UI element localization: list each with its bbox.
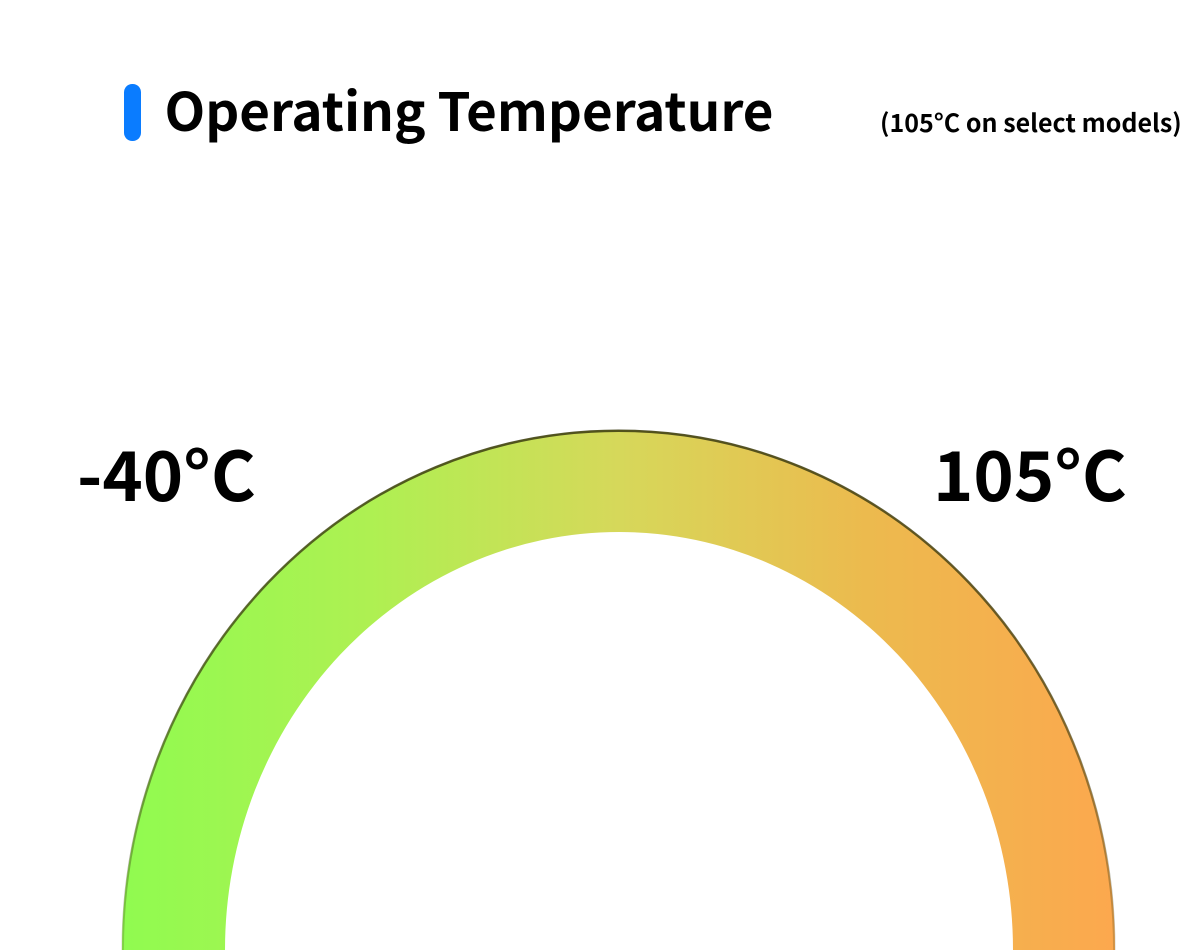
title accent bar [124, 84, 140, 140]
footnote: (105°C on select models) [880, 104, 1182, 140]
minimum temperature label: -40°C [77, 422, 256, 520]
title: Operating Temperature [164, 71, 773, 147]
maximum temperature label: 105°C [933, 422, 1127, 520]
